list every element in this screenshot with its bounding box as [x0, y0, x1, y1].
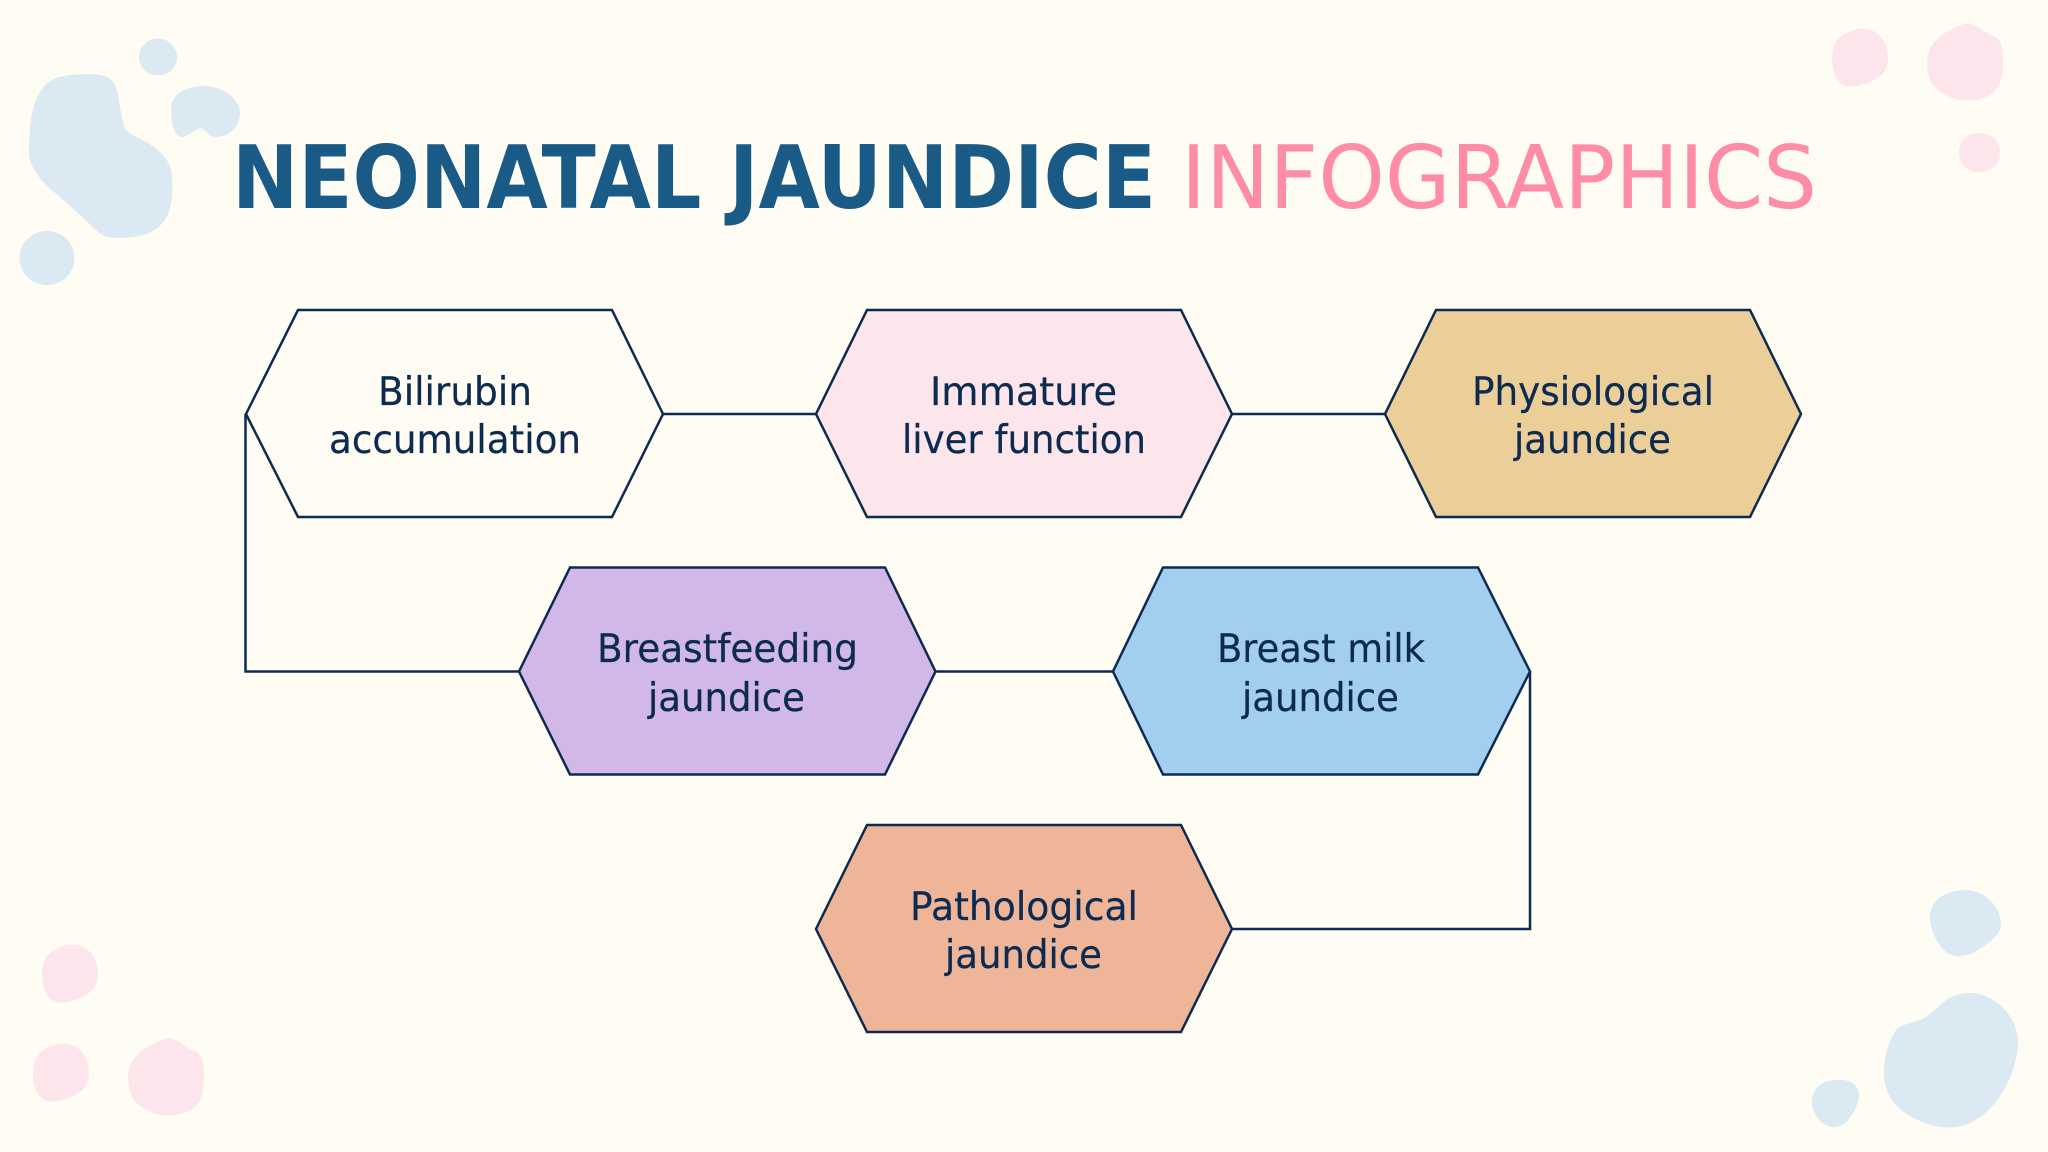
connector: Bilirubin to Immature [663, 413, 816, 415]
hexagon: Bilirubin accumulation: Bilirubin [378, 369, 532, 415]
hexagon: Physiological jaundice: jaundice [1513, 417, 1671, 463]
hexagon: Immature liver function: liver function [902, 417, 1146, 463]
hexagon: Physiological jaundice: Physiological [1472, 369, 1714, 415]
hexagon: Immature liver function: Immature [930, 369, 1117, 415]
hexagon: Pathological jaundice: Pathological [910, 884, 1138, 930]
connector: Bilirubin down to Breastfeeding [246, 414, 519, 672]
hexagon: Bilirubin accumulation: accumulation [329, 417, 581, 463]
decoration: blue blobs bottom right [1812, 890, 2018, 1127]
connector: Breast milk down to Pathological [1232, 672, 1530, 929]
hexagon: Physiological jaundice [1385, 310, 1801, 517]
connector: Immature to Physiological [1232, 413, 1385, 415]
hexagon: Breastfeeding jaundice: Breastfeeding [597, 626, 858, 672]
hexagon: Breastfeeding jaundice [519, 568, 936, 774]
hexagon: Immature liver function [816, 310, 1232, 517]
decoration: pink blobs bottom left [33, 945, 204, 1116]
hexagon: Breastfeeding jaundice: jaundice [647, 675, 805, 721]
title: INFOGRAPHICS [1181, 127, 1817, 229]
connector: Breastfeeding to Breast milk [935, 670, 1113, 673]
decoration: pink blobs top right [1832, 24, 2003, 172]
title: NEONATAL JAUNDICE [232, 127, 1156, 229]
hexagon: Pathological jaundice [816, 825, 1232, 1032]
hexagon: Pathological jaundice: jaundice [944, 932, 1102, 978]
hexagon: Bilirubin accumulation [246, 310, 663, 517]
hexagon: Breast milk jaundice [1113, 568, 1530, 774]
hexagon: Breast milk jaundice: Breast milk [1217, 626, 1425, 672]
title [232, 127, 1817, 229]
decoration: blue blobs top left [20, 38, 240, 285]
hexagon: Breast milk jaundice: jaundice [1241, 675, 1399, 721]
